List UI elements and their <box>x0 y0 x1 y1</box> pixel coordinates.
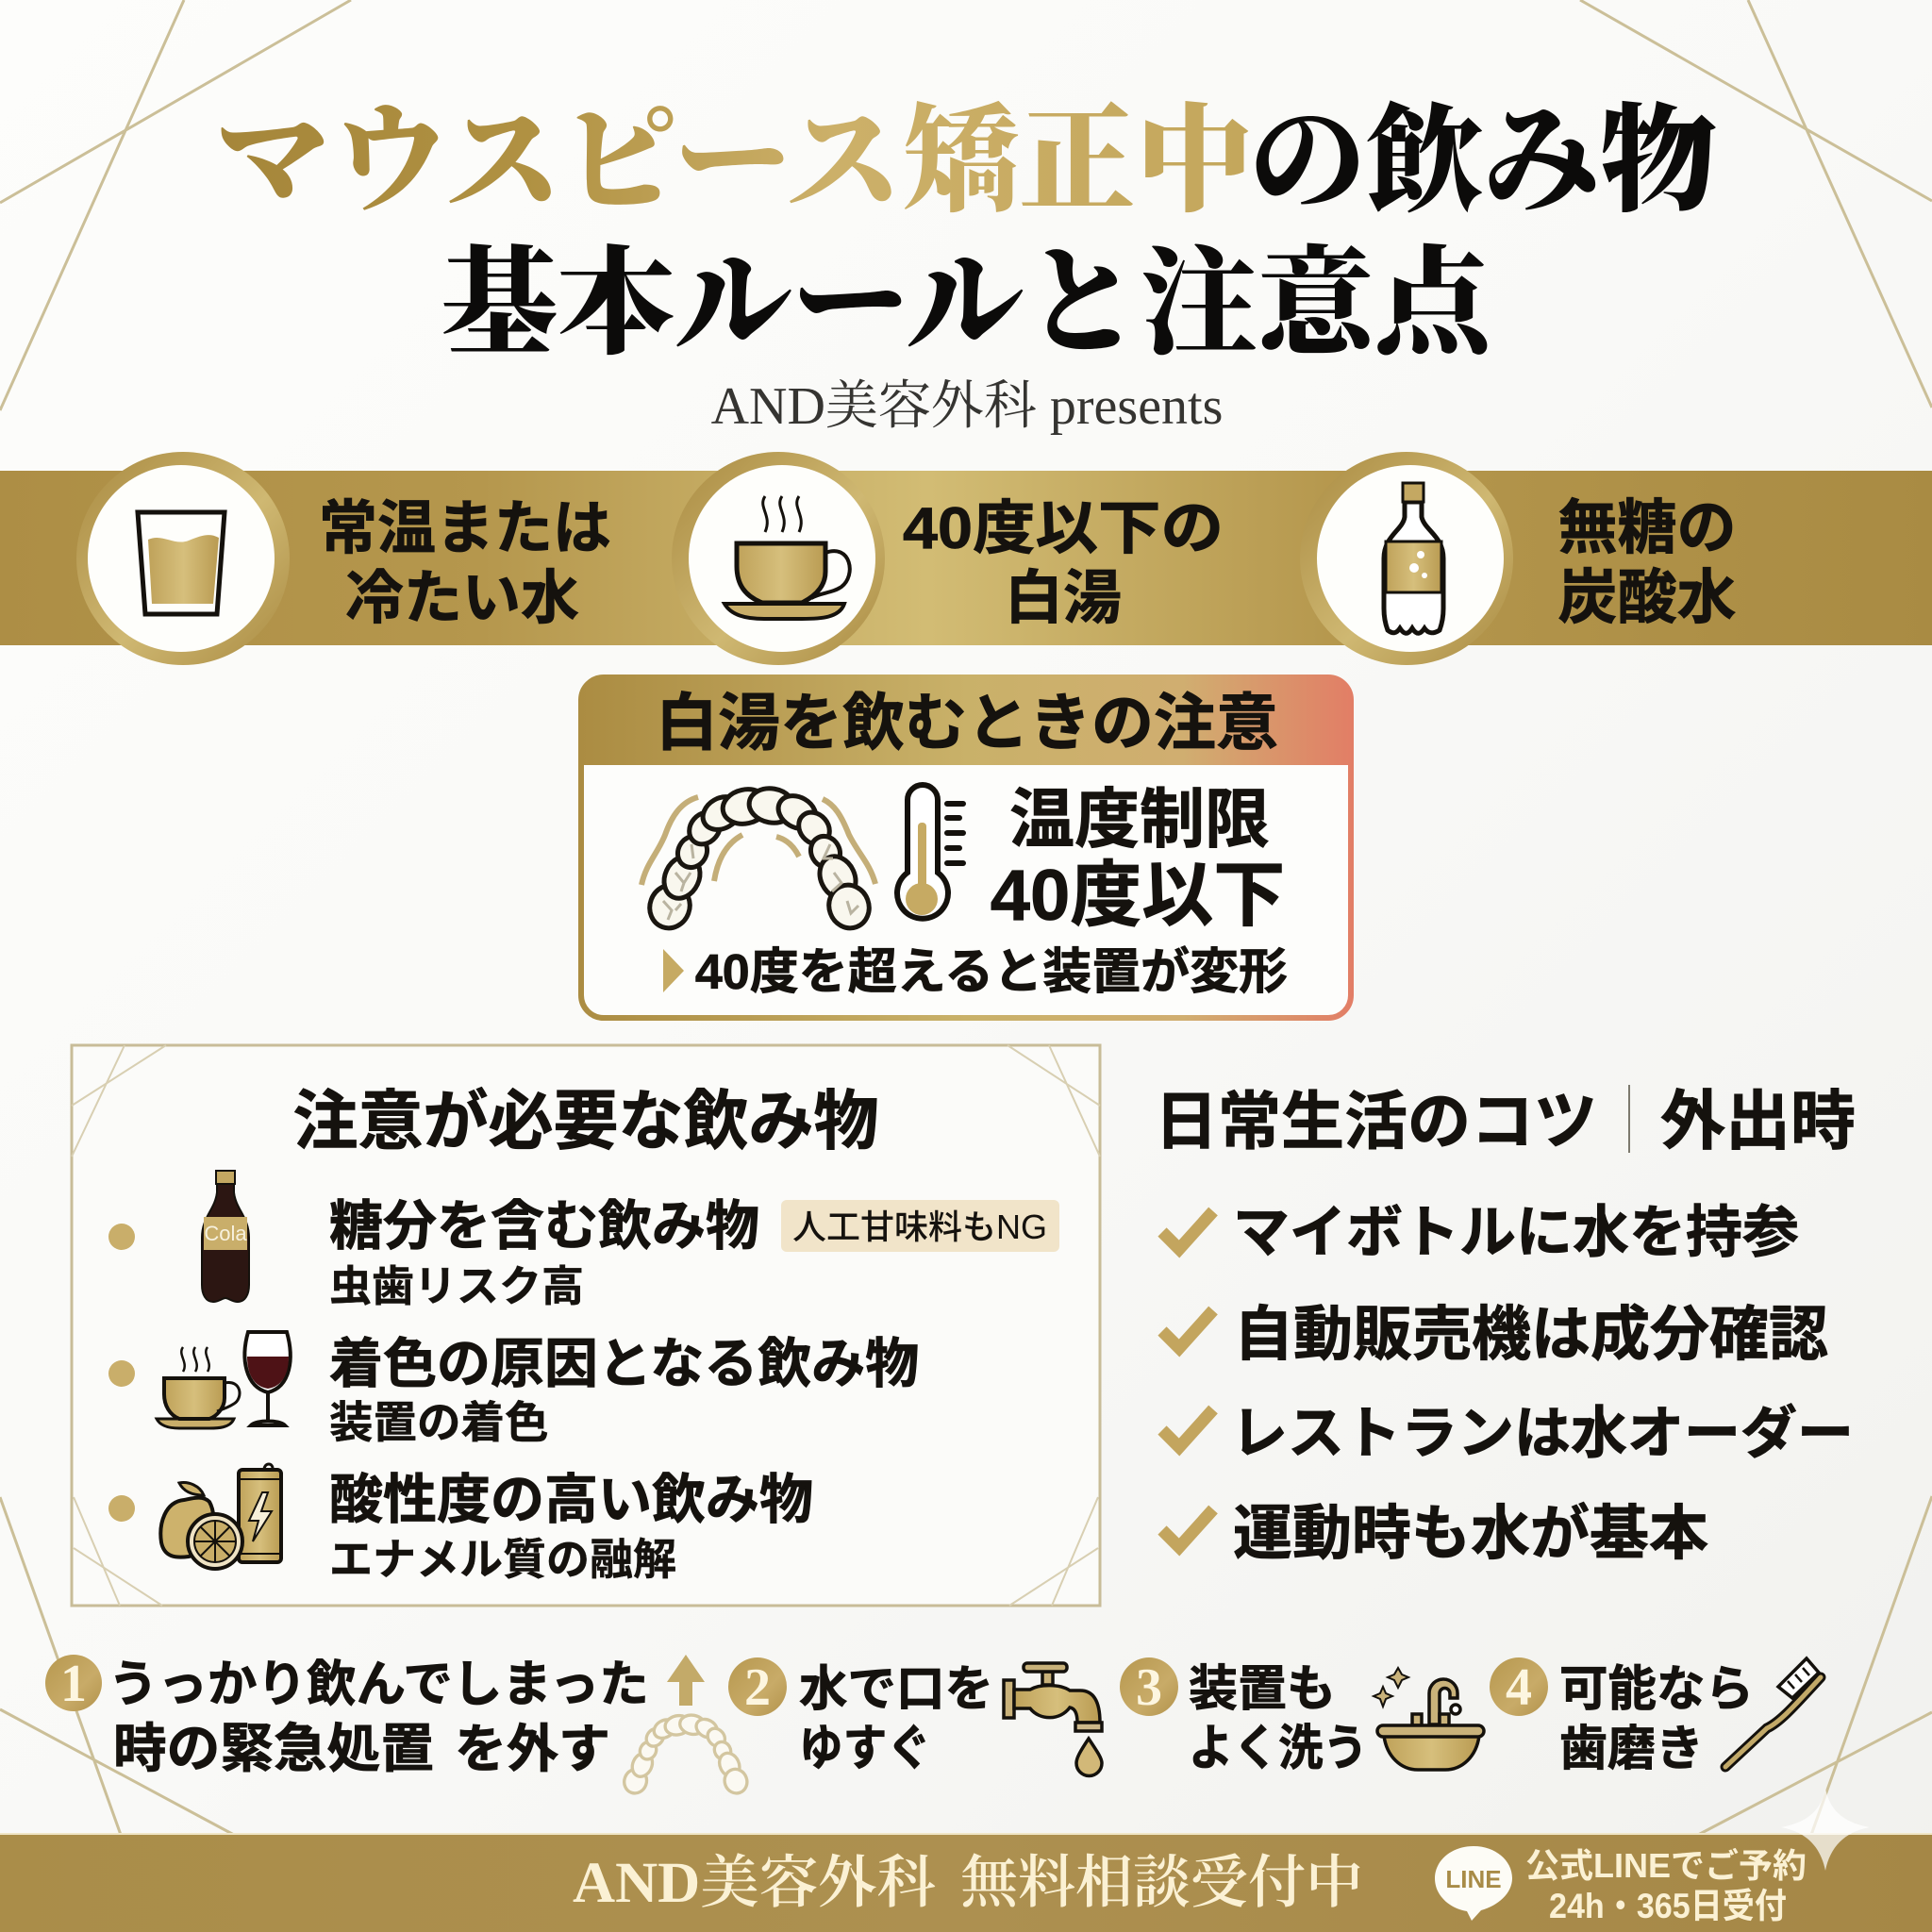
item 3: acidic drinks: エナメル質の融解 <box>329 1535 676 1584</box>
icon: lemon and energy can <box>160 1464 281 1569</box>
icon: thermometer <box>897 785 963 919</box>
step 3: 装置も <box>1189 1662 1336 1717</box>
line booking text <box>1525 1846 1807 1925</box>
title <box>214 97 1717 369</box>
text: water <box>319 496 611 631</box>
icon: toothbrush <box>1725 1658 1821 1767</box>
text: water: 常温または <box>319 496 611 561</box>
line booking text: 24h・365日受付 <box>1549 1887 1787 1925</box>
step 1: うっかり飲んでしまった <box>108 1657 649 1712</box>
tip 3: レストランは水オーダー <box>1231 1402 1854 1465</box>
item 2: staining drinks: 着色の原因となる飲み物 <box>329 1334 919 1394</box>
icon: small aligner <box>621 1713 750 1796</box>
step 4 <box>1490 1657 1821 1775</box>
tag: artificial sweeteners: 人工甘味料もNG <box>792 1208 1047 1246</box>
text: sparkling water <box>1558 495 1736 631</box>
panel: drinks requiring caution <box>72 1045 1100 1606</box>
icon: aligner arch <box>641 785 875 934</box>
clinic name: AND美容外科 <box>573 1852 936 1915</box>
item 1: sugary drinks: 糖分を含む飲み物 <box>329 1196 759 1257</box>
item 2: staining drinks <box>108 1332 919 1447</box>
text: hot water <box>903 496 1224 631</box>
step 1: 1 <box>60 1655 87 1713</box>
line booking text: 公式LINEでご予約 <box>1525 1846 1807 1885</box>
icon: wash basin <box>1374 1668 1484 1770</box>
step 4: 4 <box>1506 1658 1532 1717</box>
subtitle: AND美容外科 presents <box>711 377 1223 436</box>
text: sparkling water: 炭酸水 <box>1558 565 1736 631</box>
step 3: 3 <box>1136 1658 1162 1717</box>
sparkle <box>1781 1789 1870 1871</box>
drink 3: sparkling water bottle <box>1300 452 1513 665</box>
drink 2: hot water cup <box>672 452 885 665</box>
text: water: 冷たい水 <box>345 566 579 631</box>
step 4: 可能なら <box>1559 1661 1754 1716</box>
panel heading: 注意が必要な飲み物 <box>292 1085 879 1158</box>
text: sparkling water: 無糖の <box>1558 495 1736 561</box>
step 2: 水で口を <box>799 1661 993 1716</box>
title line 1 black: の飲み物 <box>1249 97 1717 226</box>
item 1: sugary drinks <box>108 1171 1059 1310</box>
free consultation: 無料相談受付中 <box>960 1852 1363 1915</box>
warning sentence: 40度を超えると装置が変形 <box>695 945 1288 1000</box>
icon: coffee and wine <box>157 1332 291 1428</box>
icon: LINE bubble: LINE <box>1445 1865 1502 1893</box>
step 1: 時の緊急処置 <box>113 1719 434 1778</box>
tip 1: マイボトルに水を持参 <box>1233 1201 1799 1264</box>
panel: daily life tips <box>1155 1085 1856 1567</box>
footer bar <box>0 1833 1932 1932</box>
arrow marker <box>663 949 684 992</box>
icon: LINE bubble <box>1435 1846 1512 1921</box>
drink 1: water glass <box>76 452 290 665</box>
icon: up arrow <box>667 1655 705 1706</box>
tag: artificial sweeteners <box>781 1200 1059 1252</box>
icon: faucet <box>1004 1663 1102 1775</box>
icon: cola bottle <box>202 1171 249 1302</box>
item 2: staining drinks: 装置の着色 <box>329 1398 549 1447</box>
caution heading: 白湯を飲むときの注意 <box>656 688 1278 758</box>
item 3: acidic drinks: 酸性度の高い飲み物 <box>329 1470 813 1530</box>
item 3: acidic drinks <box>108 1464 813 1584</box>
tip 2: 自動販売機は成分確認 <box>1234 1302 1828 1368</box>
step 1: を外す <box>455 1720 610 1778</box>
tip 4: 運動時も水が基本 <box>1233 1501 1708 1567</box>
temperature value: 40度以下 <box>991 856 1285 936</box>
step 4: 歯磨き <box>1559 1722 1704 1775</box>
title line 2: 基本ルールと注意点 <box>441 240 1501 369</box>
title line 1 gold: マウスピース矯正中 <box>214 97 1253 226</box>
text: hot water: 白湯 <box>1005 566 1122 631</box>
gold band: recommended drinks <box>0 452 1932 665</box>
tips heading: 日常生活のコツ <box>1155 1087 1597 1158</box>
emergency steps row <box>45 1655 1821 1796</box>
item 1: sugary drinks: 虫歯リスク高 <box>329 1262 584 1310</box>
temperature limit text: 温度制限 <box>1009 783 1270 856</box>
text: hot water: 40度以下の <box>903 496 1224 561</box>
step 3: よく洗う <box>1189 1722 1368 1776</box>
step 2 <box>728 1657 1102 1776</box>
step 3 <box>1120 1657 1484 1776</box>
step 1 <box>45 1655 750 1796</box>
caution header bar <box>579 675 1353 765</box>
step 2: 2 <box>744 1658 771 1717</box>
panel: hot water caution <box>579 675 1353 1018</box>
step 2: ゆすぐ <box>799 1722 931 1776</box>
tips heading: outings: 外出時 <box>1660 1085 1856 1158</box>
icon: cola bottle: Cola <box>204 1222 247 1245</box>
